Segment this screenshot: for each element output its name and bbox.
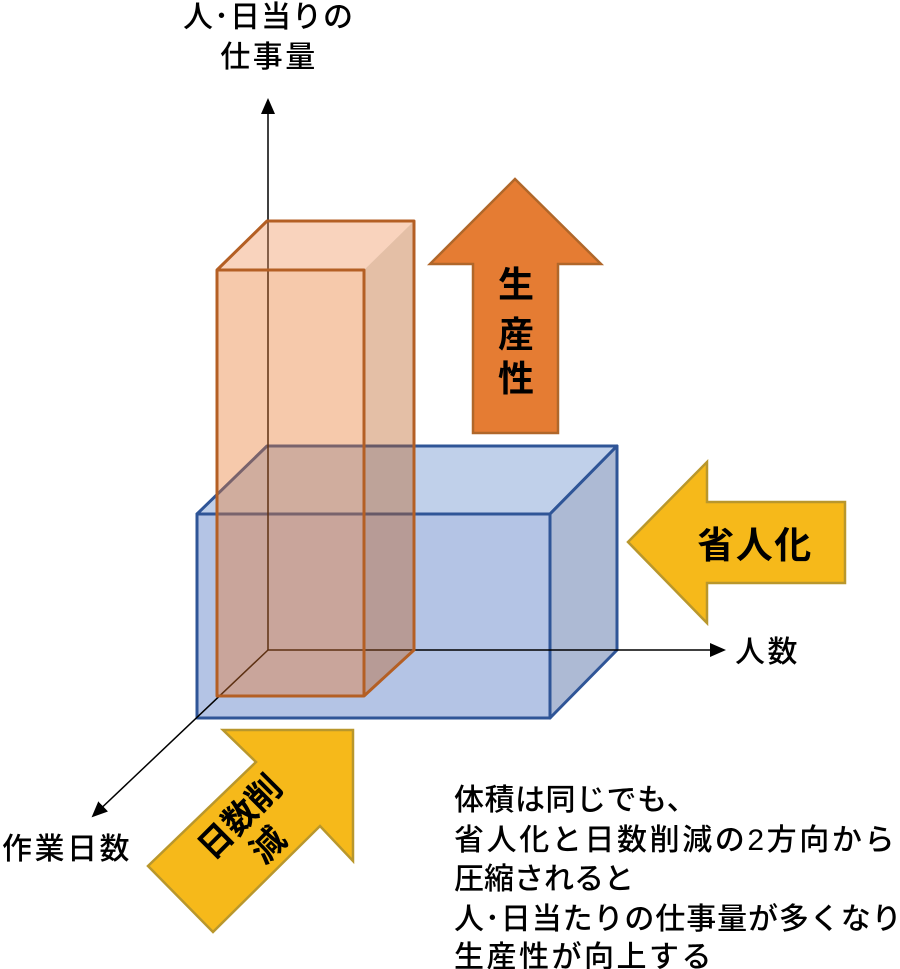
explanation text: 省人化と日数削減の2方向から xyxy=(454,824,897,857)
explanation text xyxy=(454,784,900,969)
arrow: fewer work days xyxy=(148,730,353,932)
arrow: productivity: 生 xyxy=(498,264,534,305)
blue box: before xyxy=(197,446,617,718)
arrow: productivity: 産 xyxy=(498,314,534,355)
arrow: productivity xyxy=(430,179,601,433)
y axis label xyxy=(183,1,354,74)
z axis label: 作業日数 xyxy=(2,833,132,866)
explanation text: 人･日当たりの仕事量が多くなり xyxy=(454,903,900,936)
arrow: fewer work days: 日数削 xyxy=(191,768,290,867)
arrow: labor saving: 省人化 xyxy=(697,525,813,566)
arrow: productivity: 性 xyxy=(498,358,534,399)
explanation text: 圧縮されると xyxy=(454,863,634,896)
y axis label: 人･日当りの xyxy=(183,1,354,34)
arrow: fewer work days: 減 xyxy=(243,820,294,871)
y axis label: 仕事量 xyxy=(220,41,318,74)
axes xyxy=(93,100,724,816)
explanation text: 体積は同じでも、 xyxy=(454,784,697,817)
orange box: after xyxy=(217,221,414,696)
x axis label: 人数 xyxy=(735,636,800,669)
arrow: labor saving xyxy=(628,462,845,623)
